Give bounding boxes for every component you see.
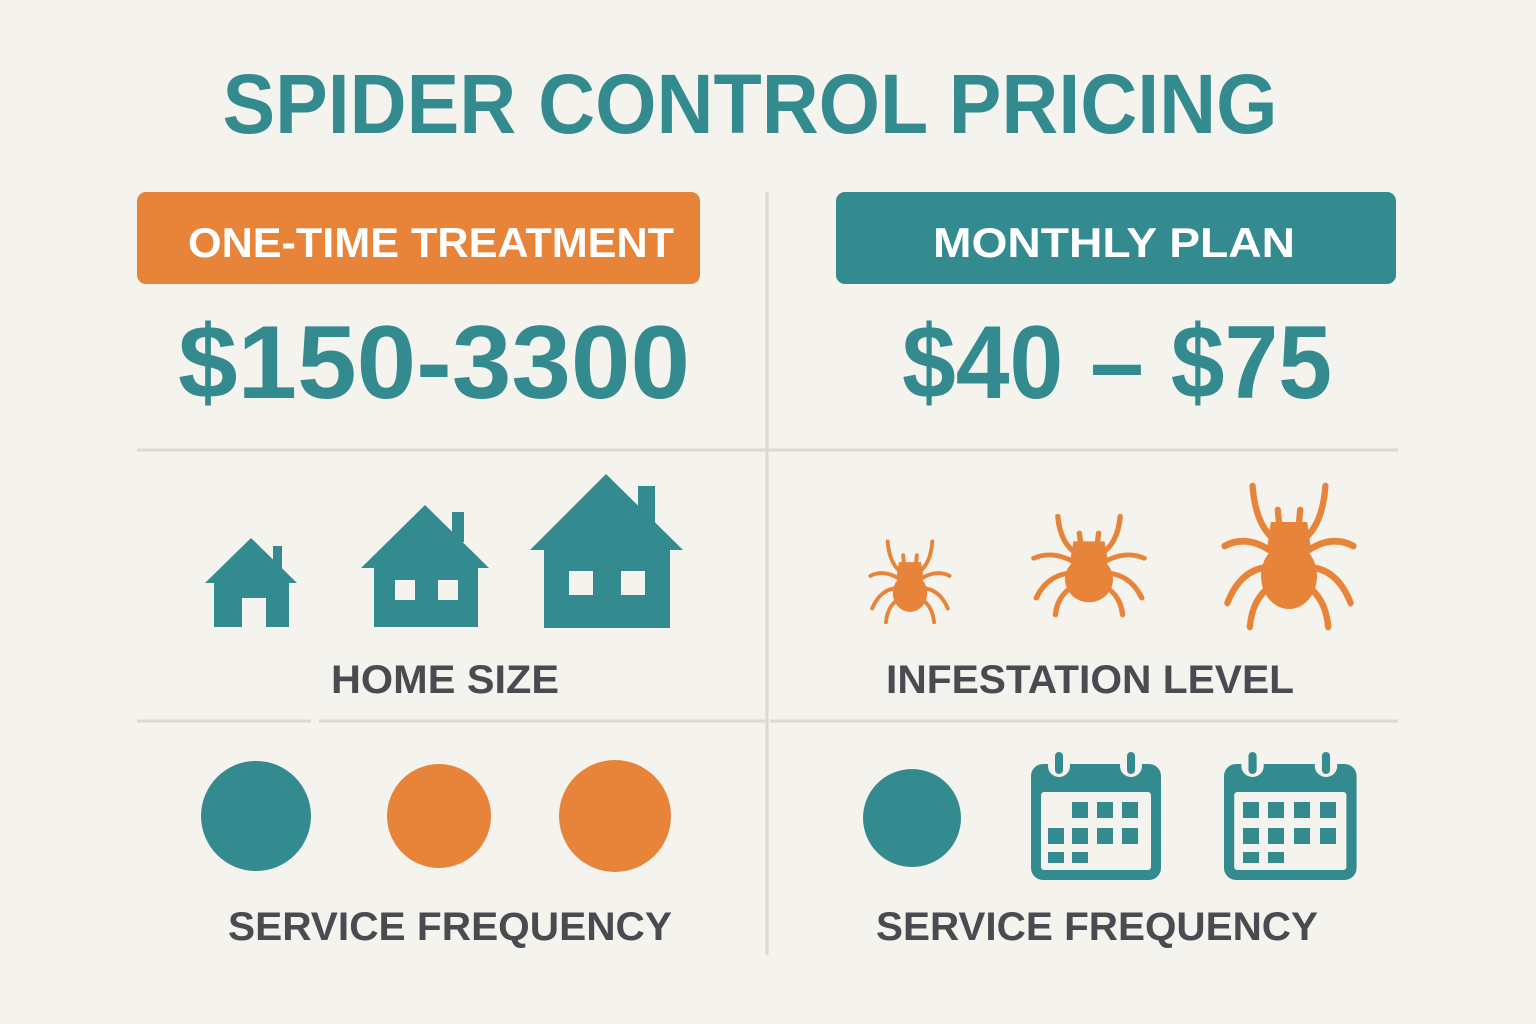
label: service frequency right: SERVICE FREQUENCY	[876, 905, 1318, 949]
label: service frequency left: SERVICE FREQUENCY	[228, 905, 672, 949]
banner: one-time treatment: ONE-TIME TREATMENT	[188, 219, 674, 266]
banner: one-time treatment	[137, 192, 700, 284]
price: monthly: $40 – $75	[902, 305, 1332, 421]
icons: houses	[205, 474, 683, 628]
icons: circle and calendars	[863, 752, 1357, 880]
price: one-time: $150-3300	[178, 305, 690, 421]
label: home size: HOME SIZE	[331, 658, 559, 702]
icons: spiders	[870, 486, 1353, 627]
title: SPIDER CONTROL PRICING	[222, 57, 1278, 151]
banner: monthly plan	[836, 192, 1396, 284]
banner: monthly plan: MONTHLY PLAN	[933, 219, 1295, 266]
label: infestation level: INFESTATION LEVEL	[886, 658, 1294, 702]
icons: frequency circles	[201, 760, 671, 872]
